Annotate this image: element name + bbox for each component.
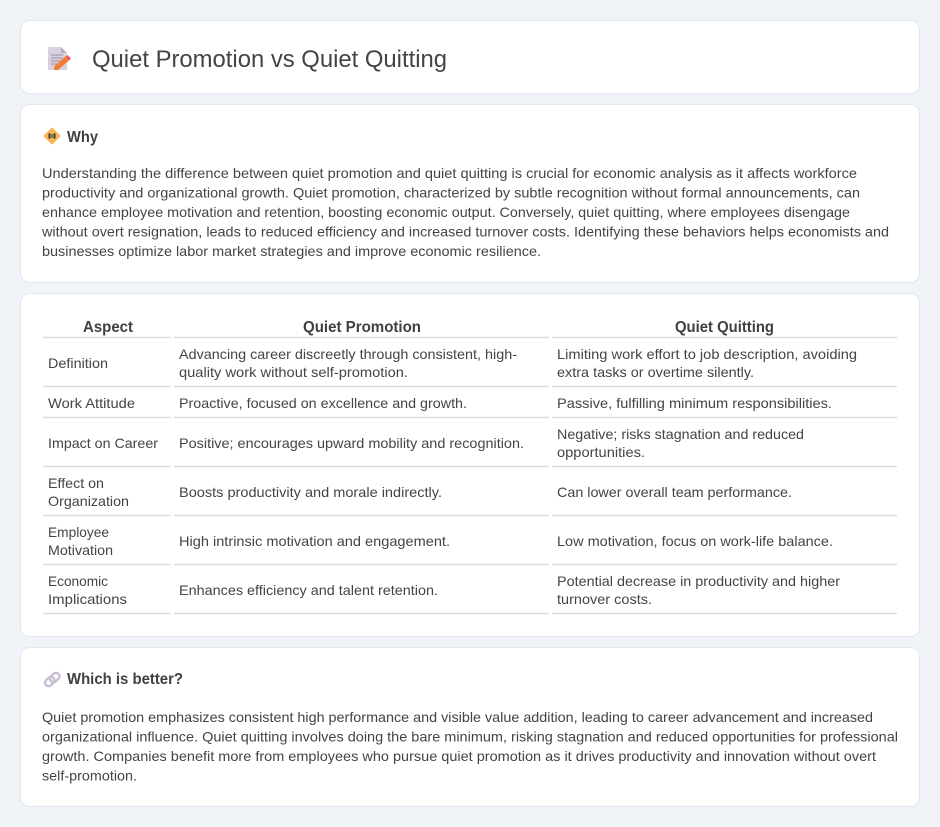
text block: why paragraph: Understanding the difference between quiet promotion and quiet quitting is crucial for economic analysis as it affects workforce: [42, 165, 857, 181]
icon: document with pencil: [48, 47, 71, 70]
table header row: [83, 319, 774, 336]
row: effect on organization: [48, 475, 792, 509]
row: effect on organization: Can lower overall team performance.: [557, 484, 792, 500]
row: effect on organization: Boosts productivity and morale indirectly.: [179, 484, 442, 500]
row: work attitude: Passive, fulfilling minimum responsibilities.: [557, 395, 832, 411]
row: definition: extra tasks or overtime silently.: [557, 364, 754, 380]
row: definition: [48, 346, 857, 380]
row: effect on organization: Effect on: [48, 475, 104, 491]
table header row: Quiet Promotion: [303, 319, 421, 336]
text block: why paragraph: businesses optimize labor market strategies and improve economic resilience.: [42, 243, 541, 259]
panel: comparison table: [20, 294, 920, 636]
row: definition: Advancing career discreetly through consistent, high-: [179, 346, 517, 362]
text block: which is better paragraph: growth. Companies benefit more from employees who pursue quiet promotion as it drives productivity and innovation without overt: [42, 748, 876, 764]
row: economic implications: Potential decrease in productivity and higher: [557, 573, 840, 589]
row: economic implications: [48, 573, 840, 607]
panel: which is better: [20, 648, 920, 806]
text block: why paragraph: enhance employee motivation and retention, boosting economic output. Conversely, quiet quitting, where employees disengage: [42, 204, 850, 220]
row: economic implications: Implications: [48, 591, 127, 607]
row: impact on career: [48, 426, 804, 460]
panel: why: [20, 104, 920, 282]
row: work attitude: Proactive, focused on excellence and growth.: [179, 395, 467, 411]
panel: header: [20, 20, 920, 94]
title: Quiet Promotion vs Quiet Quitting: [92, 46, 447, 73]
row: definition: quality work without self-promotion.: [179, 364, 408, 380]
table header row: Quiet Quitting: [675, 319, 774, 336]
text block: which is better paragraph: Quiet promotion emphasizes consistent high performance and visible value addition, leading to career advancement and increased: [42, 709, 873, 725]
text block: why paragraph: productivity and organizational growth. Quiet promotion, characterized by subtle recognition without formal announcements, can: [42, 184, 860, 200]
row: definition: Limiting work effort to job description, avoiding: [557, 346, 857, 362]
row: impact on career: opportunities.: [557, 444, 645, 460]
text block: which is better paragraph: organizational influence. Quiet quitting involves doing the bare minimum, risking stagnation and reduced opportunities for professional: [42, 728, 898, 744]
row: impact on career: Negative; risks stagnation and reduced: [557, 426, 804, 442]
row: effect on organization: Organization: [48, 493, 129, 509]
row: definition: Definition: [48, 355, 108, 371]
heading: which is better: Which is better?: [67, 671, 183, 688]
icon: link: [44, 671, 61, 688]
text block: why paragraph: [41, 165, 889, 259]
text block: why paragraph: without overt resignation, leads to reduced efficiency and increased turnover costs. Identifying these behaviors helps economists and: [41, 224, 889, 240]
row: employee motivation: [48, 524, 833, 558]
row: impact on career: Positive; encourages upward mobility and recognition.: [179, 435, 524, 451]
text block: which is better paragraph: [42, 709, 898, 784]
row: work attitude: [48, 395, 832, 411]
row: economic implications: turnover costs.: [557, 591, 652, 607]
text block: which is better paragraph: self-promotion.: [42, 768, 137, 784]
row: economic implications: Enhances efficiency and talent retention.: [179, 582, 438, 598]
table header row: Aspect: [83, 319, 134, 336]
row: employee motivation: Low motivation, focus on work-life balance.: [557, 533, 833, 549]
row: employee motivation: High intrinsic motivation and engagement.: [179, 533, 450, 549]
row: economic implications: Economic: [48, 573, 108, 589]
row: impact on career: Impact on Career: [48, 435, 158, 451]
row: work attitude: Work Attitude: [48, 395, 135, 411]
row: employee motivation: Motivation: [48, 542, 113, 558]
icon: warning diamond: [44, 128, 60, 144]
heading: why: Why: [67, 129, 98, 146]
row: employee motivation: Employee: [48, 524, 109, 540]
